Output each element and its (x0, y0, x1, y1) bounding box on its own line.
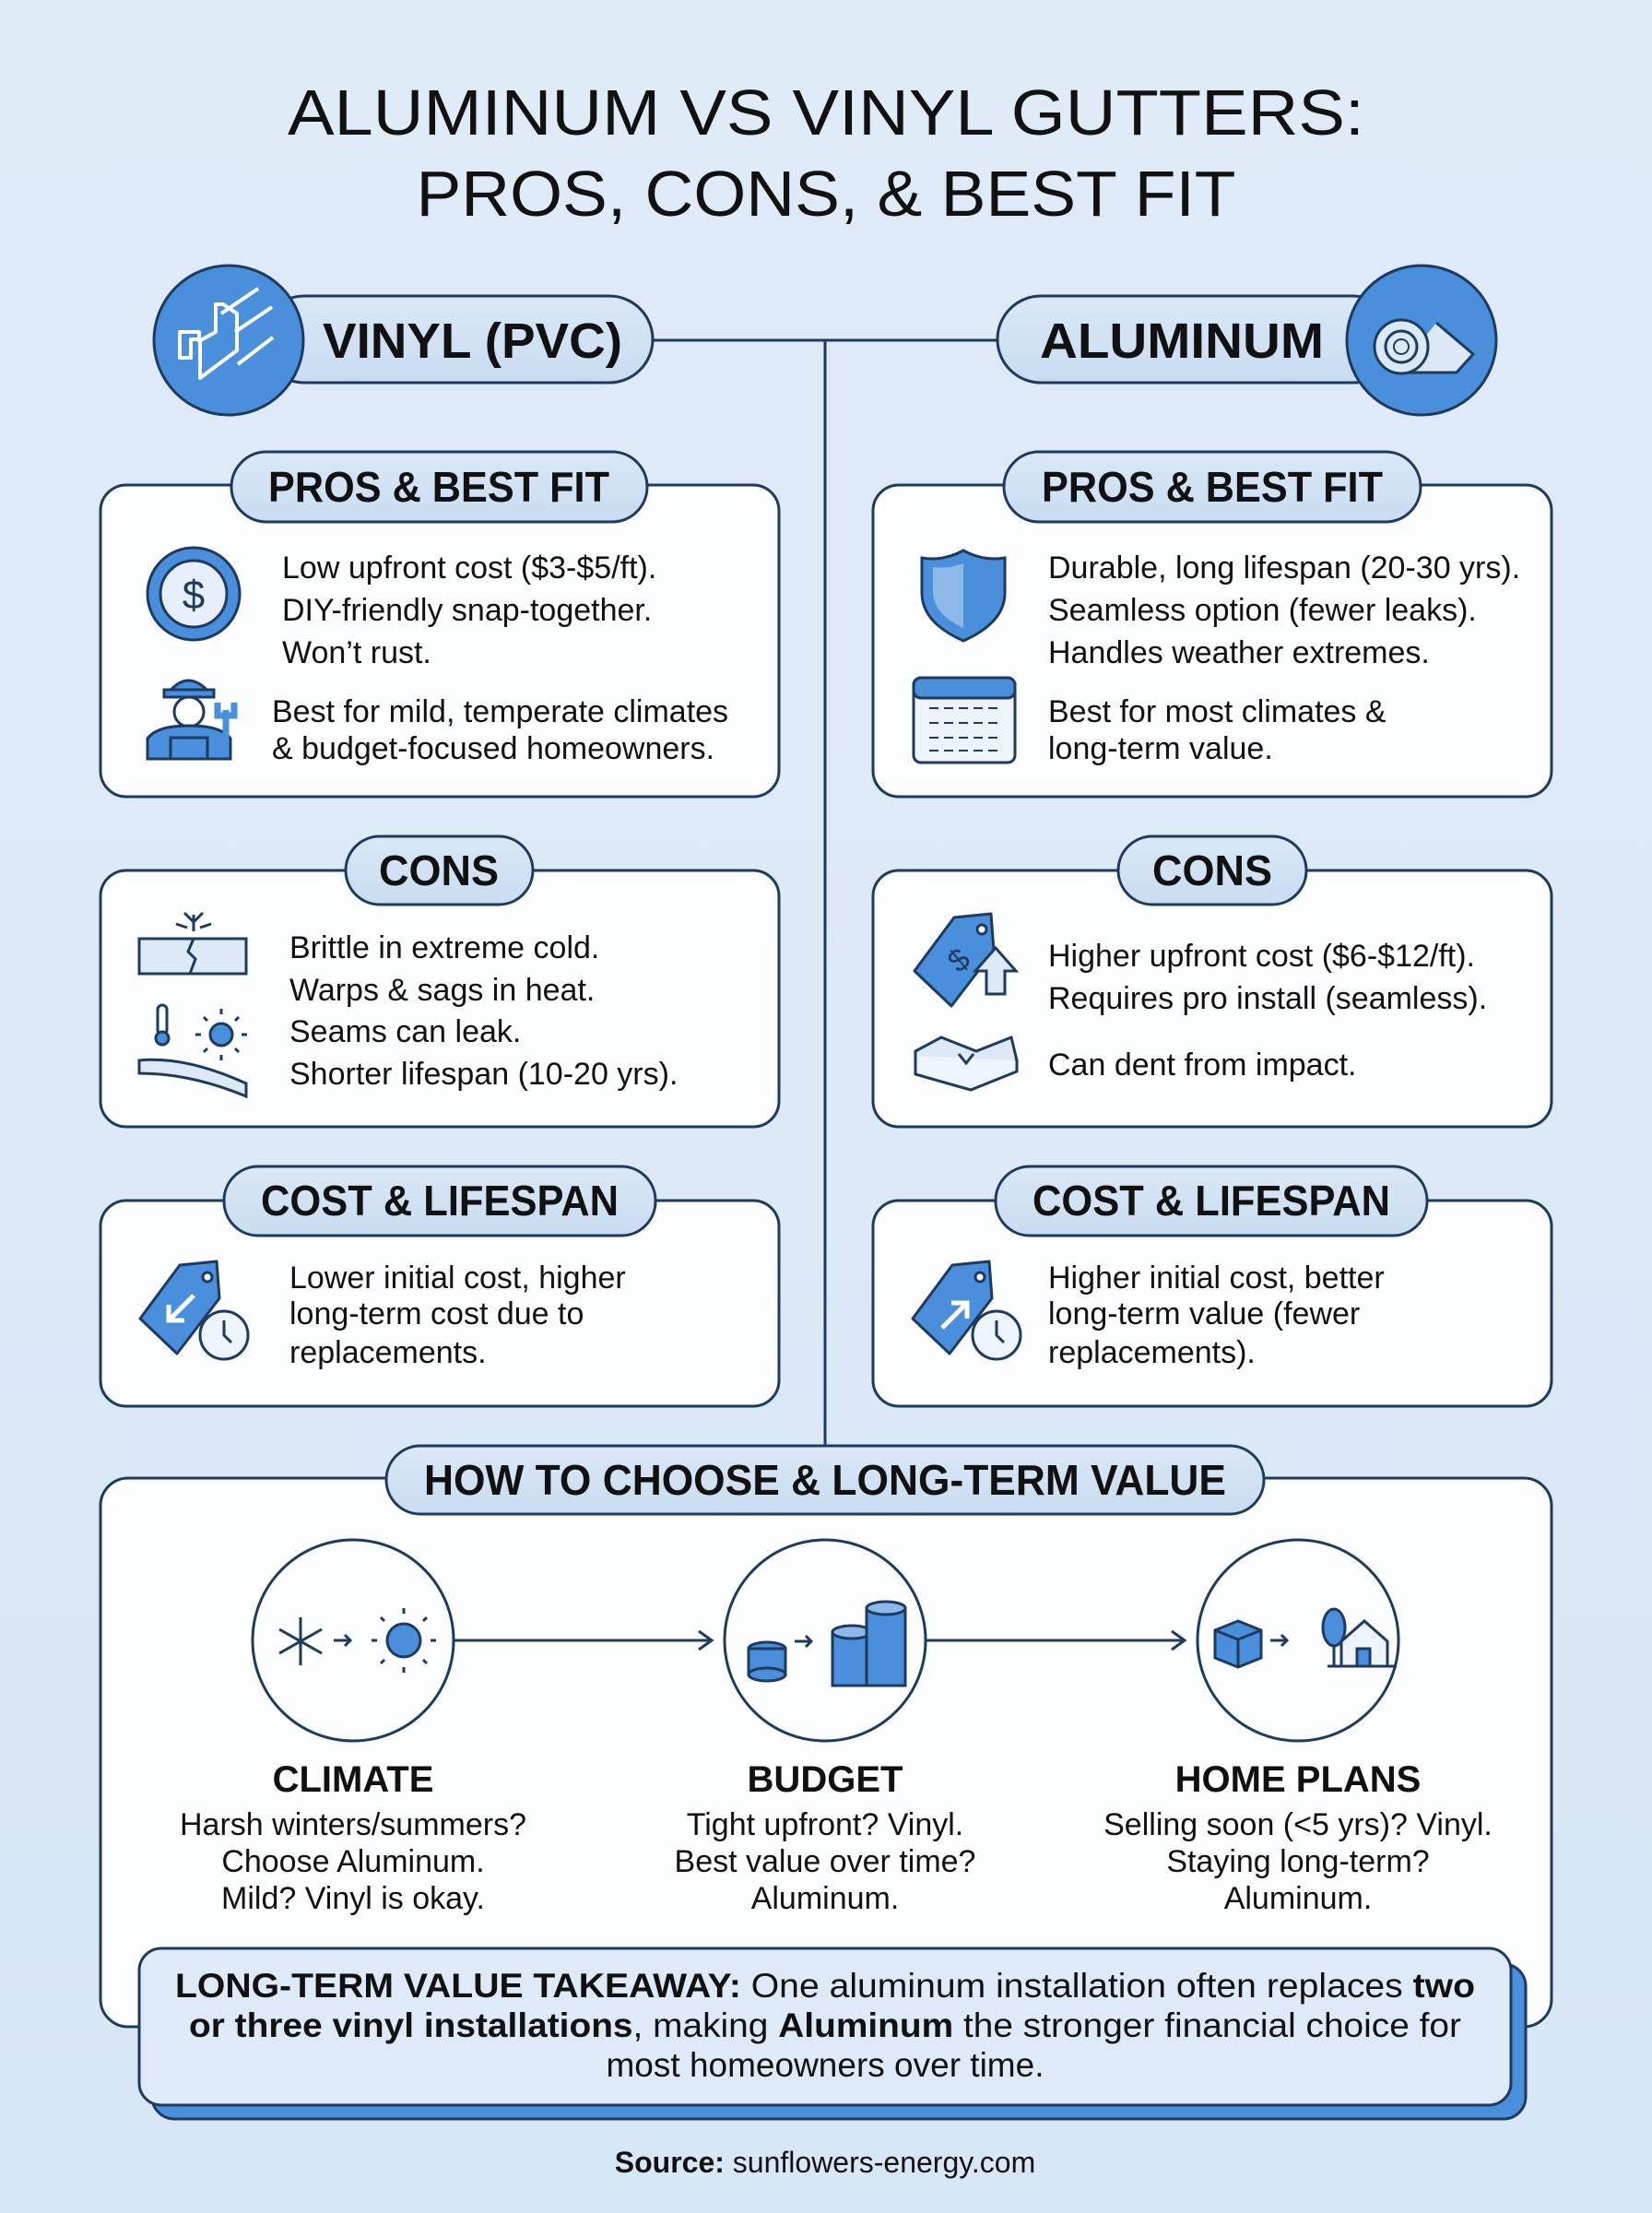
panel: vinyl pros: DIY-friendly snap-together. (282, 593, 652, 628)
panel: vinyl cons: Brittle in extreme cold. (289, 930, 599, 965)
text: climate: Harsh winters/summers? (180, 1807, 526, 1842)
header: aluminum (997, 266, 1496, 415)
panel: aluminum cost & lifespan: replacements). (1048, 1335, 1256, 1370)
icon: thermometer and sun (139, 1005, 247, 1096)
panel: vinyl pros: PROS & BEST FIT (268, 463, 609, 511)
icon: tag down with clock (140, 1261, 248, 1359)
text: home plans: Aluminum. (1224, 1881, 1372, 1916)
icon: aluminum roll (1347, 266, 1496, 415)
icon: calendar (914, 678, 1015, 763)
arrow: climate to budget (454, 1631, 712, 1650)
panel: aluminum cost & lifespan: long-term value (fewer (1048, 1296, 1360, 1331)
text: home plans (1103, 1759, 1493, 1916)
text: climate: Choose Aluminum. (221, 1844, 485, 1879)
icon: dollar coin: $ (183, 573, 205, 618)
text: climate: Mild? Vinyl is okay. (221, 1881, 485, 1916)
text: budget: BUDGET (748, 1759, 903, 1800)
icon: price tag up: $ (941, 941, 977, 979)
icon: cracked block (139, 913, 246, 974)
source: Source: sunflowers-energy.com (615, 2146, 1035, 2179)
panel: aluminum pros: Seamless option (fewer leaks). (1048, 593, 1477, 628)
icon: climate circle (253, 1540, 454, 1741)
panel: vinyl pros: Best for mild, temperate climates (272, 694, 728, 729)
panel: vinyl cons: Warps & sags in heat. (289, 973, 595, 1008)
panel: vinyl cost & lifespan: COST & LIFESPAN (261, 1177, 619, 1225)
panel: vinyl cons: Shorter lifespan (10-20 yrs). (289, 1057, 678, 1092)
panel: vinyl cons (100, 836, 779, 1127)
text: budget: Best value over time? (675, 1844, 975, 1879)
panel: vinyl cons: CONS (379, 846, 499, 894)
text: home plans: Selling soon (<5 yrs)? Vinyl. (1103, 1807, 1493, 1842)
panel: vinyl pros (100, 452, 779, 797)
panel: aluminum pros: Durable, long lifespan (20-30 yrs). (1048, 550, 1520, 586)
header: aluminum: ALUMINUM (1040, 314, 1324, 369)
text: home plans: HOME PLANS (1175, 1759, 1421, 1800)
panel: aluminum cons: Higher upfront cost ($6-$12/ft). (1048, 939, 1475, 974)
panel: vinyl cost & lifespan: long-term cost due to (289, 1296, 584, 1331)
icon: tag up with clock (913, 1261, 1021, 1359)
callout: long-term value takeaway (139, 1948, 1526, 2119)
header: vinyl (154, 266, 653, 415)
text: budget: Aluminum. (751, 1881, 899, 1916)
icon: worker (148, 680, 234, 759)
connector lines (653, 340, 998, 1448)
panel: aluminum pros (873, 452, 1552, 797)
icon: dented gutter (915, 1037, 1017, 1090)
text: budget (675, 1759, 975, 1916)
title (288, 77, 1364, 230)
panel: vinyl pros: Low upfront cost ($3-$5/ft). (282, 550, 656, 586)
callout: long-term value takeaway: most homeowners over time. (606, 2046, 1044, 2084)
panel: aluminum cons: Requires pro install (seamless). (1048, 981, 1487, 1016)
panel: aluminum pros: Handles weather extremes. (1048, 635, 1430, 670)
text: budget: Tight upfront? Vinyl. (687, 1807, 963, 1842)
icon: shield (922, 550, 1005, 641)
arrow: budget to home plans (926, 1631, 1185, 1650)
callout: long-term value takeaway: LONG-TERM VALUE TAKEAWAY: One aluminum installation often replaces two (175, 1967, 1475, 2005)
panel: vinyl cost & lifespan (100, 1166, 779, 1406)
icon: dollar coin (148, 548, 240, 640)
panel: aluminum pros: PROS & BEST FIT (1042, 463, 1383, 511)
panel: vinyl cost & lifespan: replacements. (289, 1335, 487, 1370)
icon: home plans circle (1198, 1540, 1398, 1741)
panel: aluminum cons: Can dent from impact. (1048, 1047, 1356, 1083)
text: climate (180, 1759, 526, 1916)
panel: aluminum cost & lifespan: COST & LIFESPAN (1032, 1177, 1390, 1225)
panel: aluminum cons: CONS (1152, 846, 1272, 894)
icon: vinyl gutter (154, 266, 303, 415)
title: PROS, CONS, & BEST FIT (417, 158, 1235, 230)
panel: aluminum pros: Best for most climates & (1048, 694, 1386, 729)
panel: how to choose: HOW TO CHOOSE & LONG-TERM VALUE (424, 1456, 1226, 1504)
header: vinyl: VINYL (PVC) (323, 314, 622, 369)
panel: vinyl cost & lifespan: Lower initial cost, higher (289, 1260, 626, 1296)
panel: vinyl pros: & budget-focused homeowners. (272, 731, 714, 766)
panel: aluminum cons (873, 836, 1552, 1127)
panel: aluminum pros: long-term value. (1048, 731, 1273, 766)
text: home plans: Staying long-term? (1166, 1844, 1430, 1879)
panel: vinyl pros: Won’t rust. (282, 635, 431, 670)
icon: price tag up (914, 914, 1016, 1006)
panel: vinyl cons: Seams can leak. (289, 1014, 521, 1049)
panel: aluminum cost & lifespan: Higher initial cost, better (1048, 1260, 1385, 1296)
callout: long-term value takeaway: or three vinyl installations , making Aluminum the stronger financial choice for (189, 2006, 1461, 2044)
icon: budget circle (725, 1540, 926, 1741)
panel: how to choose (100, 1446, 1552, 2027)
text: climate: CLIMATE (273, 1759, 433, 1800)
panel: aluminum cost & lifespan (873, 1166, 1552, 1406)
title: ALUMINUM VS VINYL GUTTERS: (288, 77, 1364, 148)
